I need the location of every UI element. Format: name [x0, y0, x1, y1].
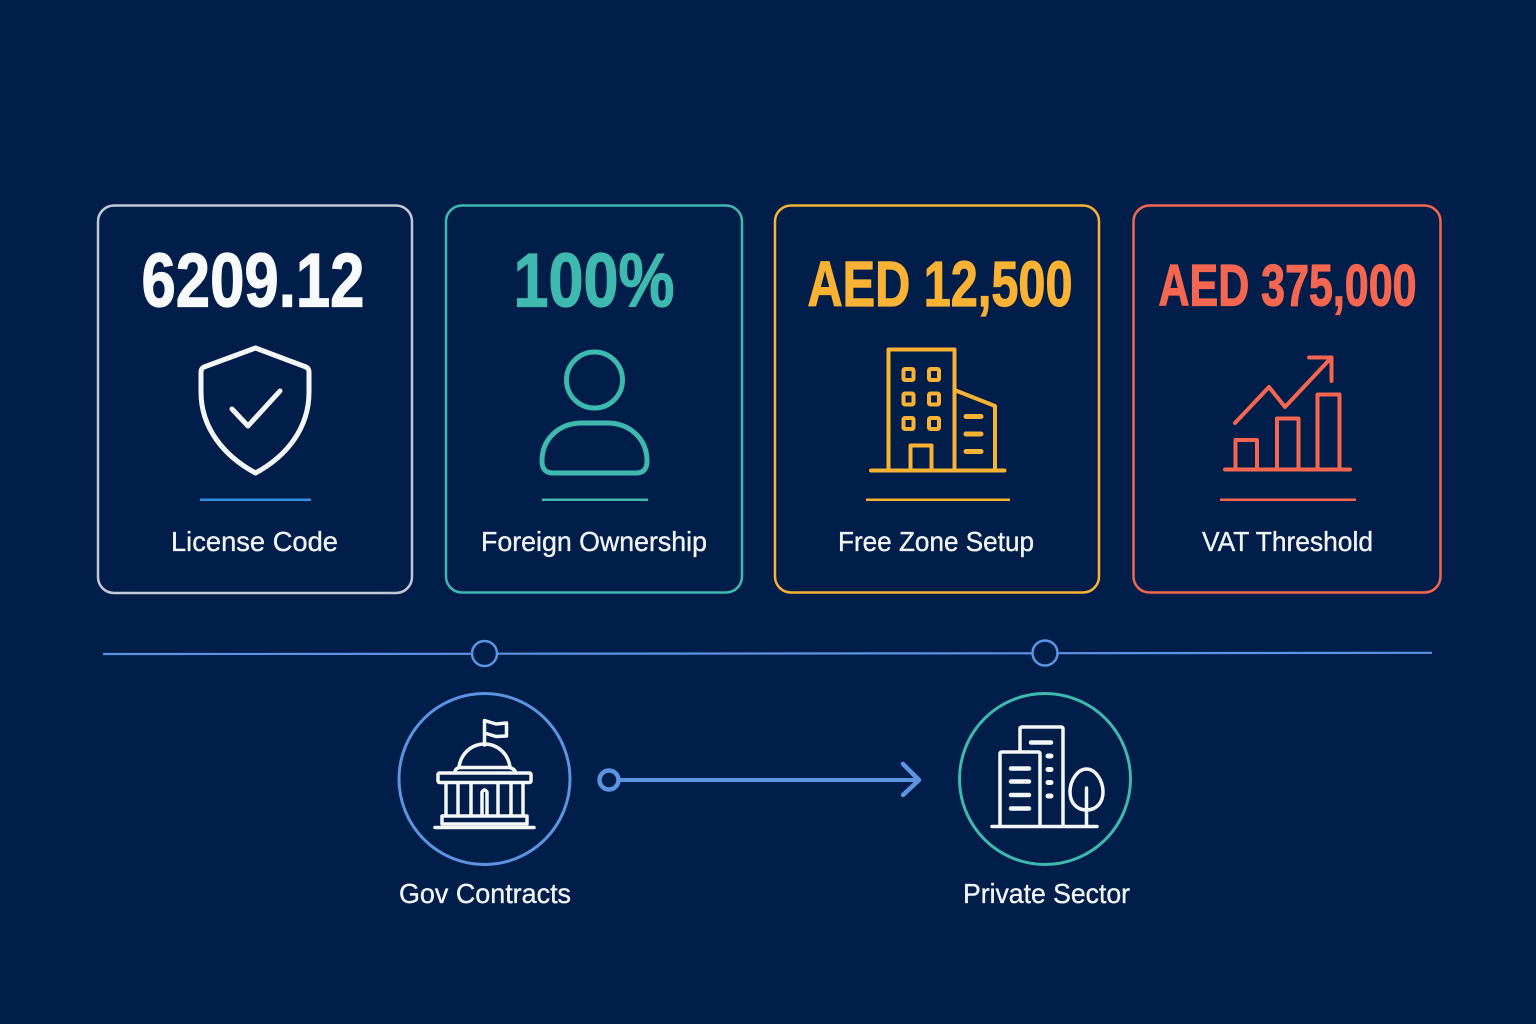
divider	[866, 498, 1010, 501]
icon: city buildings and tree	[992, 727, 1103, 826]
label: Foreign Ownership: Foreign Ownership	[481, 526, 707, 557]
node: Gov Contracts	[399, 694, 571, 909]
panel: license code	[98, 206, 412, 593]
divider	[542, 498, 648, 501]
panel: foreign ownership	[446, 206, 742, 592]
panel: VAT threshold	[1134, 206, 1440, 592]
value: AED 375,000: AED 375,000	[1158, 254, 1416, 318]
timeline	[103, 640, 1432, 666]
icon: shield with check	[201, 348, 309, 473]
label: Private Sector: Private Sector	[963, 878, 1130, 909]
arrow: gov to private	[600, 764, 919, 795]
node: Private Sector	[960, 694, 1130, 909]
label: Free Zone Setup: Free Zone Setup	[838, 526, 1034, 557]
label: VAT Threshold: VAT Threshold	[1202, 526, 1373, 557]
divider	[1220, 498, 1356, 501]
icon: person	[542, 352, 647, 473]
label: Gov Contracts: Gov Contracts	[399, 878, 571, 909]
label: License Code: License Code	[171, 526, 338, 557]
value: AED 12,500: AED 12,500	[808, 248, 1072, 320]
icon: government building	[435, 720, 534, 828]
panel: free zone setup	[775, 206, 1099, 592]
icon: office building	[871, 350, 1004, 470]
value: 100%: 100%	[514, 238, 674, 324]
icon: rising bar chart	[1225, 358, 1350, 470]
divider	[200, 498, 311, 501]
value: 6209.12: 6209.12	[142, 238, 364, 324]
